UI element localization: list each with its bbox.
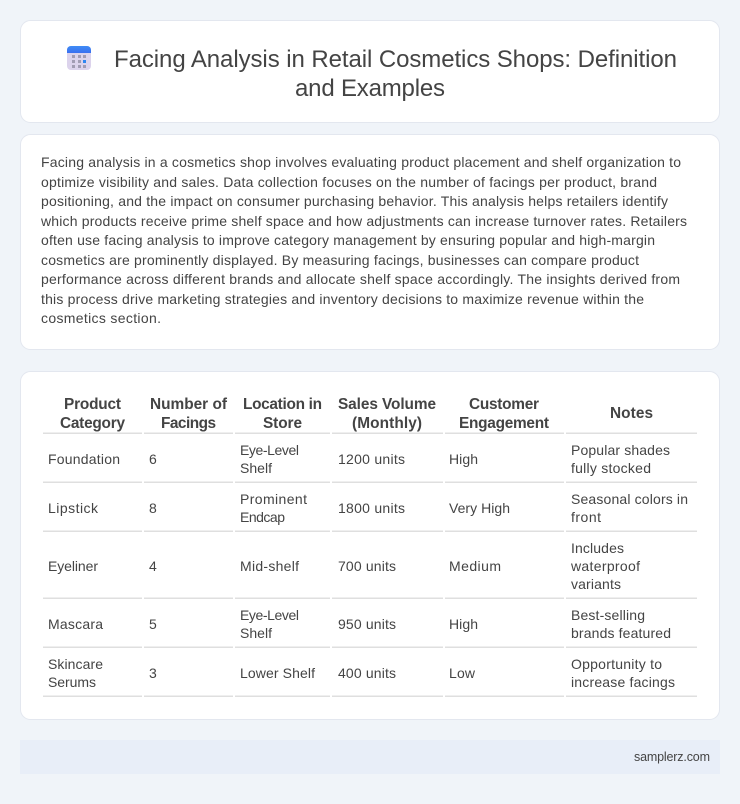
table row: Foundation: High: [449, 451, 478, 467]
table row: Eyeliner: 4: [149, 558, 157, 574]
table row: Eyeliner: Includes: [571, 540, 624, 556]
table row: Mascara: Best-selling: [571, 607, 645, 623]
table row: Skincare Serums: 3: [149, 665, 157, 681]
text block: description paragraph: cosmetics section.: [41, 310, 161, 326]
table row: Skincare Serums: Low: [449, 665, 476, 681]
text block: description paragraph: this process drive marketing strategies and inventory decisions to maximize revenue within the: [41, 291, 644, 307]
table row: Eyeliner: Medium: [449, 558, 501, 574]
text block: description paragraph: optimize visibility and sales. Data collection focuses on the number of facings per product, brand: [41, 174, 657, 190]
table header row: Sales Volume: [338, 396, 436, 413]
table row: Foundation: Eye-Level: [240, 442, 299, 458]
table row: Foundation: 1200 units: [338, 451, 405, 467]
table row: Lipstick: 8: [149, 500, 157, 516]
table row: Lipstick: Very High: [449, 500, 510, 516]
table header row: [60, 396, 653, 432]
title: and Examples: [295, 75, 445, 102]
table row: Eyeliner: 700 units: [338, 558, 396, 574]
table row: Lipstick: Seasonal colors in: [571, 491, 688, 507]
table row: Mascara: 5: [149, 616, 157, 632]
table row: Lipstick: [48, 491, 688, 525]
title: [114, 46, 677, 102]
table header row: (Monthly): [352, 415, 422, 432]
footer bar: [20, 740, 720, 774]
table row: Lipstick: Endcap: [240, 509, 285, 525]
text block: description paragraph: cosmetics are prominently displayed. By measuring facings, businesses can compare product: [41, 252, 639, 268]
table row: Foundation: 6: [149, 451, 157, 467]
text block: description paragraph: positioning, and the impact on consumer purchasing behavior. This analysis helps retailers identify: [41, 193, 668, 209]
table row: Eyeliner: waterproof: [570, 558, 640, 574]
table header row: Customer: [469, 396, 539, 413]
table row: Skincare Serums: 400 units: [338, 665, 396, 681]
text block: description paragraph: performance across different brands and allocate shelf space accordingly. The insights derived from: [41, 271, 680, 287]
text block: description paragraph: which products receive prime shelf space and how adjustments can increase turnover rates. Retailers: [40, 213, 687, 229]
table header row: Product: [64, 396, 121, 413]
table header row: Number of: [150, 396, 228, 413]
table row: Skincare Serums: Skincare: [48, 656, 103, 672]
table row: Mascara: [48, 607, 671, 641]
panel: data table: [20, 372, 720, 720]
panel: description: [20, 134, 720, 350]
table row: Eyeliner: Mid-shelf: [240, 558, 299, 574]
table row: Eyeliner: Eyeliner: [48, 558, 98, 574]
table header row: Facings: [161, 415, 216, 432]
table row: Skincare Serums: Lower Shelf: [240, 665, 315, 681]
table row: Foundation: Popular shades: [571, 442, 670, 458]
panel: title header: [20, 20, 720, 122]
table header row: Notes: [610, 405, 653, 422]
icon: calendar: [67, 46, 91, 70]
table row: Lipstick: 1800 units: [338, 500, 405, 516]
text block: description paragraph: Facing analysis in a cosmetics shop involves evaluating product placement and shelf organization to: [41, 154, 681, 170]
table row: Lipstick: Prominent: [240, 491, 307, 507]
table row: Foundation: fully stocked: [571, 460, 651, 476]
footer text: samplerz.com: samplerz.com: [634, 750, 710, 764]
table row: Eyeliner: variants: [571, 576, 621, 592]
table row: Mascara: Shelf: [240, 625, 272, 641]
table row: Lipstick: front: [571, 509, 601, 525]
table row: Skincare Serums: [48, 656, 675, 690]
table header row: Location in: [243, 396, 322, 413]
table row: Eyeliner: [48, 540, 640, 592]
table row: Skincare Serums: Opportunity to: [571, 656, 662, 672]
table row: Skincare Serums: Serums: [48, 674, 96, 690]
table row: Mascara: brands featured: [571, 625, 671, 641]
table header row: Engagement: [459, 415, 549, 432]
table row: Skincare Serums: increase facings: [571, 674, 675, 690]
table row: Mascara: Mascara: [48, 616, 103, 632]
table header row: Category: [60, 415, 125, 432]
table row: Mascara: Eye-Level: [240, 607, 299, 623]
text block: description paragraph: often use facing analysis to improve category management by ensuring popular and high-margin: [41, 232, 655, 248]
table header row: Store: [263, 415, 302, 432]
table row: Mascara: 950 units: [338, 616, 396, 632]
title: Facing Analysis in Retail Cosmetics Shops: Definition: [114, 46, 677, 73]
table row: Foundation: [48, 442, 670, 476]
table row: Lipstick: Lipstick: [48, 500, 99, 516]
table rules: [43, 432, 697, 697]
table row: Foundation: Foundation: [48, 451, 120, 467]
table row: Mascara: High: [449, 616, 478, 632]
table row: Foundation: Shelf: [240, 460, 272, 476]
text block: description paragraph: [40, 154, 687, 326]
